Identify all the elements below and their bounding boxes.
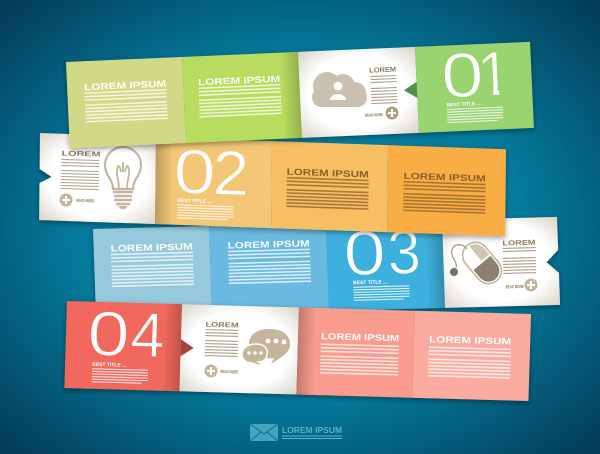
icon: plus button bubbles panel bbox=[204, 364, 218, 378]
icon: plus button cloud panel bbox=[386, 106, 398, 120]
panel: green 2: LOREM IPSUM bbox=[198, 74, 280, 87]
panel: green 3 number: 0 bbox=[440, 40, 485, 112]
strip 2: orange bbox=[39, 132, 506, 236]
text: bubbles panel: READ MORE bbox=[220, 369, 238, 374]
panel: red number: BEST TITLE ... bbox=[92, 362, 127, 369]
icon: mouse cable bbox=[452, 245, 467, 268]
panel: green 2 bbox=[182, 52, 302, 143]
strip 4: red bbox=[64, 298, 531, 401]
panel: orange 1 number: 0 bbox=[173, 137, 216, 208]
panel: green 1: LOREM IPSUM bbox=[84, 79, 166, 92]
panel: green 1 bbox=[66, 57, 186, 148]
panel: pink 2: LOREM IPSUM bbox=[429, 334, 511, 346]
icon: plus button bulb panel bbox=[60, 194, 72, 206]
panel: pink 2 bbox=[412, 311, 531, 401]
arrow: red notch bbox=[180, 339, 194, 357]
panel: blue 3 number: 0 bbox=[342, 218, 387, 289]
text: bubbles panel: LOREM bbox=[205, 322, 239, 329]
panel: orange 2: LOREM IPSUM bbox=[287, 167, 369, 180]
icon: plus button mouse panel bbox=[524, 278, 538, 292]
panel: pink 1: LOREM IPSUM bbox=[321, 331, 399, 343]
panel: blue 3 number: BEST TITLE ... bbox=[353, 279, 388, 286]
panel: red number: 4 bbox=[130, 300, 166, 371]
panel: blue 1 bbox=[93, 226, 212, 317]
text: cloud panel bbox=[363, 67, 398, 118]
panel: white bulb base bbox=[39, 133, 156, 224]
text: cloud panel: LOREM bbox=[369, 67, 396, 75]
panel: white bubbles base bbox=[179, 304, 299, 394]
panel: green 3 number: BEST TITLE ... bbox=[447, 101, 482, 109]
text: bubbles panel bbox=[204, 322, 240, 374]
text: mouse panel: LOREM bbox=[502, 240, 536, 247]
panel: green 3 number bbox=[415, 38, 534, 133]
panel: red number: 0 bbox=[87, 299, 131, 370]
footer logo bbox=[250, 424, 342, 441]
text: bulb panel: READ MORE bbox=[76, 198, 94, 203]
icon: envelope bbox=[250, 424, 278, 441]
panel: pink 1 bbox=[296, 307, 415, 398]
panel: orange 1 number: 2 bbox=[212, 138, 249, 209]
panel: blue 1: LOREM IPSUM bbox=[111, 241, 193, 254]
text: mouse panel: READ MORE bbox=[506, 284, 524, 289]
panel: orange 1 number bbox=[155, 136, 272, 228]
panel: red number bbox=[64, 298, 182, 391]
panel: orange 3 bbox=[387, 145, 506, 236]
text: cloud panel: READ MORE bbox=[365, 112, 383, 118]
panel: blue 2 bbox=[209, 223, 329, 314]
panel: blue 2: LOREM IPSUM bbox=[228, 238, 310, 251]
panel: orange 2 bbox=[271, 141, 388, 232]
icon: computer mouse bbox=[457, 237, 507, 289]
icon: speech bubbles bbox=[242, 329, 290, 367]
panel: blue 3 number: 3 bbox=[386, 217, 422, 288]
panel: white cloud base bbox=[298, 47, 419, 138]
panel: orange 1 number: BEST TITLE ... bbox=[177, 198, 212, 205]
text: mouse panel bbox=[502, 240, 537, 289]
panel: green 3 number: 1 bbox=[476, 39, 512, 110]
strip 3: blue bbox=[93, 214, 560, 317]
strip 1: green bbox=[66, 38, 534, 148]
footer text: LOREM IPSUM bbox=[282, 426, 342, 435]
panel: white mouse base bbox=[442, 217, 560, 308]
icon: light bulb bbox=[105, 147, 141, 209]
arrow: green notch bbox=[404, 82, 417, 98]
panel: blue 3 number bbox=[326, 217, 445, 311]
icon: mouse plug bbox=[450, 268, 458, 276]
panel: orange 3: LOREM IPSUM bbox=[404, 171, 486, 184]
text: bulb panel: LOREM bbox=[61, 151, 101, 159]
icon: cloud with user bbox=[312, 72, 367, 107]
text: bulb panel bbox=[60, 151, 101, 204]
